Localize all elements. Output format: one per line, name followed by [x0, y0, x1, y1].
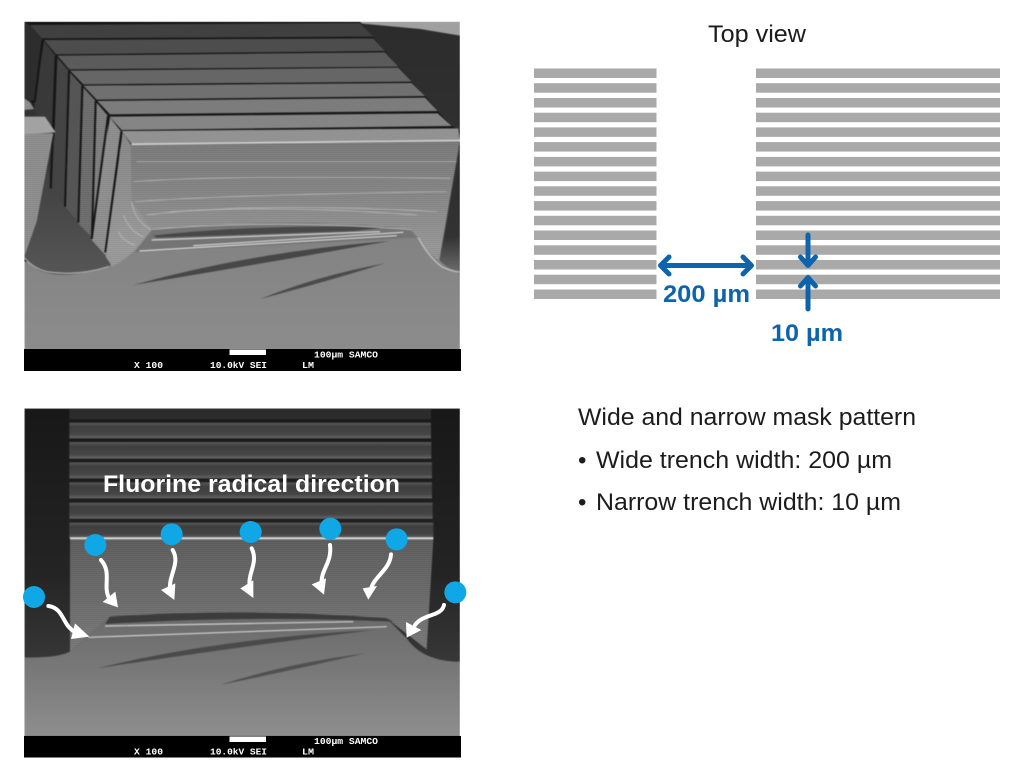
description text block [578, 404, 916, 516]
SEM caption: magnification and scale: X 100 [134, 746, 163, 758]
white curved arrows [48, 545, 444, 639]
SEM caption: magnification and scale: LM [302, 360, 314, 371]
SEM caption: magnification and scale: X 100 [134, 360, 163, 371]
SEM caption: magnification and scale [134, 350, 378, 371]
SEM info bar [24, 349, 461, 371]
left block of narrow lines [534, 68, 656, 299]
bullet: wide trench width: • [578, 447, 586, 474]
SEM photo: angled view of trench structure [24, 22, 461, 371]
arrow: narrow trench width, upward [800, 278, 816, 309]
fluorine radical particles and arrows [23, 518, 466, 639]
bullet: narrow trench width: • [578, 489, 586, 516]
heading: top view: Top view [708, 21, 807, 48]
right block of narrow lines [756, 68, 1000, 299]
description heading: Wide and narrow mask pattern [578, 404, 916, 431]
blue radical dots [23, 518, 466, 608]
micrograph scene [24, 22, 460, 350]
SEM caption: magnification and scale: 100µm SAMCO [314, 736, 378, 747]
micrograph scene [24, 408, 460, 737]
SEM caption: magnification and scale [134, 736, 378, 758]
bullet: narrow trench width: Narrow trench width: 10 µm [596, 489, 901, 516]
SEM caption: magnification and scale: 10.0kV SEI [210, 360, 267, 371]
SEM info bar [24, 736, 461, 758]
label: 200 µm: 200 µm [663, 281, 750, 308]
scale bar [230, 350, 266, 355]
SEM caption: magnification and scale: LM [302, 746, 314, 758]
top view mask pattern diagram [534, 68, 1000, 347]
photo heading: fluorine radical direction: Fluorine radical direction [103, 471, 400, 498]
SEM caption: magnification and scale: 10.0kV SEI [210, 746, 267, 758]
label: 10 µm: 10 µm [771, 320, 843, 347]
arrow: wide trench width [660, 257, 752, 274]
bullet: wide trench width: Wide trench width: 200 µm [596, 447, 892, 474]
SEM photo: fluorine radical direction [23, 408, 466, 758]
arrow: narrow trench width, downward [800, 235, 816, 266]
scale bar [230, 736, 266, 742]
SEM caption: magnification and scale: 100µm SAMCO [314, 350, 378, 360]
